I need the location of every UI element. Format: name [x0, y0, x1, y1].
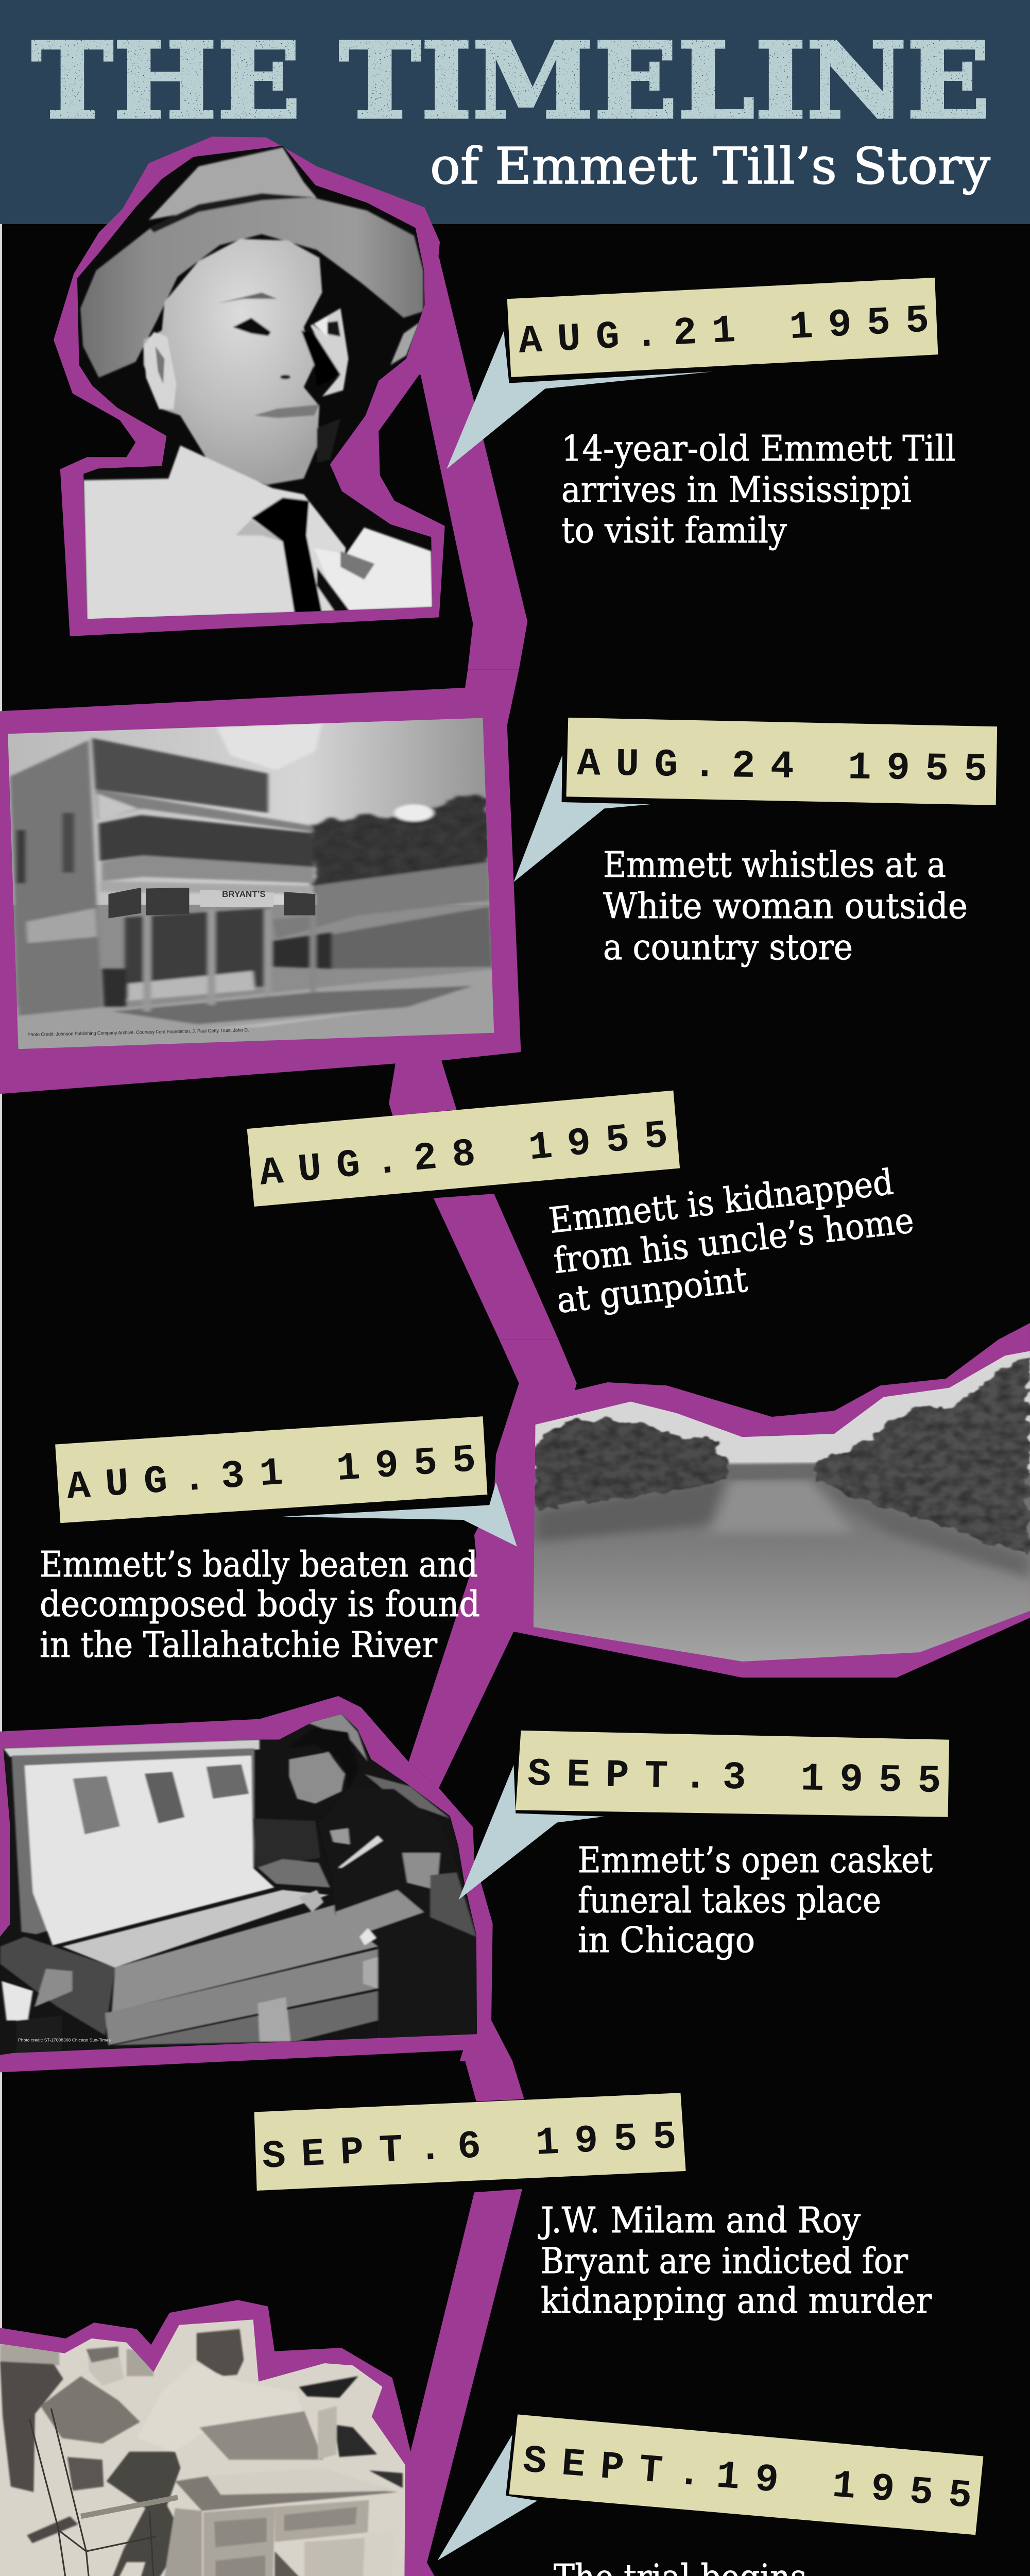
wall shade	[253, 1819, 320, 1868]
drawer column	[203, 2507, 274, 2576]
date tag: Sept 3: SEPT.3 1955	[527, 1752, 941, 1804]
tail: Aug 24	[513, 755, 650, 882]
text: Aug 31	[40, 1545, 480, 1666]
date tag: Sept 3	[516, 1731, 949, 1817]
water reflections	[536, 1480, 1030, 1579]
text: Aug 24	[603, 845, 968, 968]
shirt	[138, 2363, 304, 2452]
far trees	[723, 1463, 821, 1480]
date tag: Aug 31	[55, 1416, 487, 1523]
text: Sept 6	[538, 2200, 932, 2321]
pants	[107, 2452, 184, 2576]
subtitle: of Emmett Till’s Story	[430, 137, 990, 195]
text: Aug 31: in the Tallahatchie River	[40, 1625, 437, 1666]
header band	[0, 0, 1030, 224]
panel: portrait of Emmett Till	[52, 137, 464, 636]
date tag: Aug 24: AUG.24 1955	[577, 742, 988, 792]
leather chair	[0, 2361, 63, 2492]
text: Sept 6: kidnapping and murder	[541, 2281, 932, 2321]
standing man head	[197, 2329, 244, 2376]
date tag: Aug 28: AUG.28 1955	[258, 1113, 670, 1196]
flowers	[305, 1714, 368, 1762]
casket rim and body	[112, 1905, 377, 2012]
text: Aug 31: Emmett’s badly beaten and	[40, 1545, 478, 1585]
lid frame	[11, 1748, 254, 1934]
title	[31, 19, 990, 195]
text: Aug 24: a country store	[603, 927, 853, 968]
text: Sept 3: in Chicago	[578, 1920, 755, 1961]
text: Aug 21: 14-year-old Emmett Till	[561, 429, 956, 469]
spine segment 4 and courtroom frame	[0, 2189, 522, 2576]
back slats	[0, 2344, 59, 2365]
sky	[0, 713, 506, 905]
date tag: Sept 6	[254, 2093, 686, 2191]
paper	[0, 2293, 407, 2576]
tail: Aug 31	[282, 1482, 517, 1547]
arms and hands	[335, 1890, 424, 1934]
callout tails	[282, 331, 713, 2561]
dark hand	[299, 2376, 358, 2398]
date tag: Aug 28	[247, 1091, 680, 1207]
panel	[304, 2538, 365, 2576]
date tag: Sept 19: SEPT.19 1955	[521, 2438, 973, 2519]
text: Sept 6: Bryant are indicted for	[541, 2241, 908, 2282]
casket interior	[62, 1890, 329, 1968]
wooden chair	[30, 2409, 377, 2576]
scribble	[199, 2411, 323, 2460]
panel: store photo	[0, 713, 506, 1054]
upper storey	[92, 738, 268, 813]
portrait frame	[54, 137, 464, 636]
spine segment 2	[434, 1194, 558, 1340]
text: Sept 6: J.W. Milam and Roy	[538, 2200, 861, 2241]
tail: Sept 3	[458, 1765, 604, 1900]
spine segment 1	[394, 256, 527, 670]
tail: Sept 19	[437, 2434, 537, 2561]
typewriter	[369, 2470, 403, 2488]
quilted lining	[25, 1756, 274, 1945]
hand and cuff at left	[35, 1969, 72, 2007]
date tag: Aug 21	[507, 278, 938, 377]
left edge strip	[0, 224, 2, 2576]
desktop	[175, 2476, 399, 2511]
date tag: Aug 31: AUG.31 1955	[65, 1438, 477, 1510]
spine segment 3	[465, 2061, 524, 2102]
woman's face	[289, 1752, 345, 1804]
floor under desk	[274, 2551, 361, 2576]
road	[16, 969, 494, 1049]
photo credit: Photo Credit: Johnson Publishing Company Archive. Courtesy Ford Foundation, J. Paul Getty Trust, John D.	[27, 1027, 249, 1037]
trees	[308, 796, 489, 892]
left trees	[534, 1420, 729, 1511]
curtain	[3, 1740, 260, 1757]
cloud	[217, 723, 322, 770]
table	[258, 1859, 330, 1888]
shopfront	[125, 908, 269, 998]
frame: store photo with spine	[0, 670, 521, 1116]
panel: courtroom sketch	[0, 2293, 407, 2576]
brick side	[10, 740, 102, 1015]
signs	[108, 888, 141, 918]
text: Sept 3: Emmett’s open casket	[578, 1840, 933, 1881]
text: Aug 28: at gunpoint	[555, 1259, 750, 1321]
woman's hair	[289, 1727, 358, 1789]
water	[525, 1473, 1030, 1671]
text: Aug 21: arrives in Mississippi	[561, 470, 912, 511]
seated man	[40, 2376, 140, 2444]
text: Aug 24: White woman outside	[603, 886, 968, 927]
desk side	[163, 2508, 202, 2576]
balcony	[98, 815, 314, 867]
date tag: Aug 21: AUG.21 1955	[518, 298, 930, 364]
date tag: Sept 19	[509, 2414, 983, 2535]
text: Aug 21	[561, 429, 956, 551]
text: Sept 3	[578, 1840, 933, 1961]
frame: casket photo with spine	[0, 1696, 512, 2072]
text: Aug 28: from his uncle’s home	[552, 1200, 916, 1282]
tail: Aug 21	[447, 331, 713, 469]
panel: casket photo	[0, 1700, 493, 2058]
shed	[272, 862, 489, 939]
woman's dress	[319, 1789, 477, 2038]
sign text: Bryant's: BRYANT’S	[222, 889, 266, 899]
date tag: Sept 6: SEPT.6 1955	[261, 2115, 677, 2179]
frame: river photo with spine	[408, 1323, 1030, 1788]
photo credit: Photo credit: ST-17008368 Chicago Sun-Times	[18, 2037, 111, 2042]
right man	[334, 2425, 377, 2457]
text: Aug 31: decomposed body is found	[40, 1584, 480, 1625]
text: Aug 28: Emmett is kidnapped	[547, 1162, 896, 1242]
text: Sept 3: funeral takes place	[578, 1880, 881, 1921]
text: Aug 28	[547, 1162, 916, 1321]
panel: river photo	[525, 1340, 1030, 1671]
portrait photo	[77, 146, 433, 619]
title: THE TIMELINE	[31, 19, 990, 142]
photo base	[0, 713, 506, 1054]
right trees	[815, 1358, 1030, 1556]
date tag: Aug 24	[566, 718, 997, 805]
text: Aug 21: to visit family	[561, 511, 787, 551]
pinned photos	[73, 1776, 120, 1835]
middle drawer	[274, 2500, 369, 2542]
sky	[525, 1340, 1030, 1487]
text: Aug 24: Emmett whistles at a	[603, 845, 946, 886]
